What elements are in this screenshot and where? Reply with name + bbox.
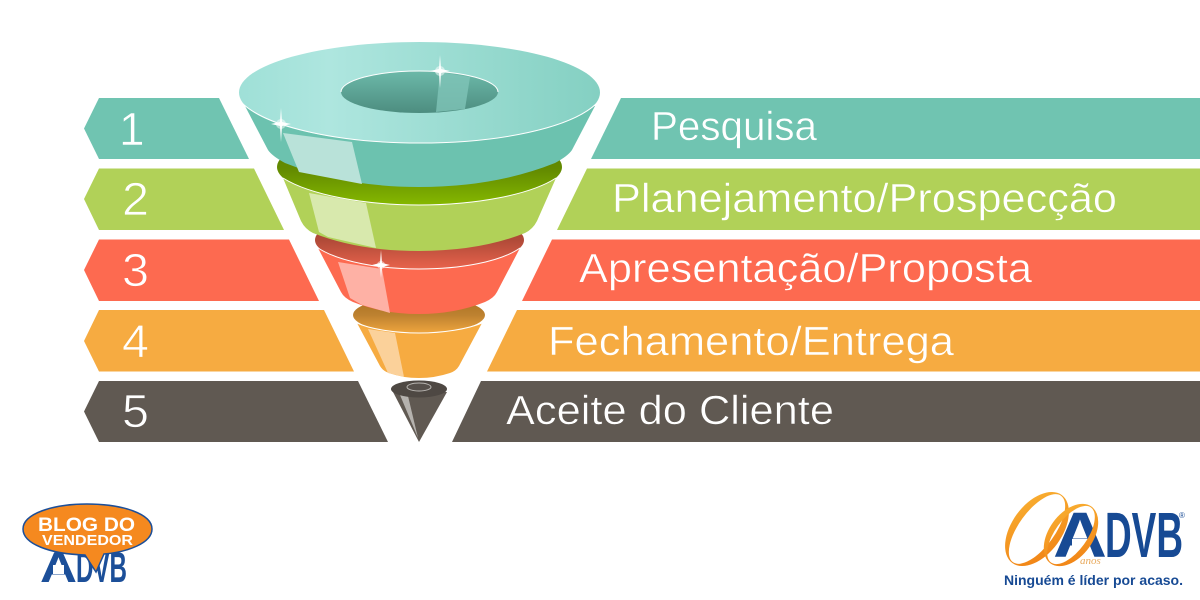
row 2 right bar: Planejamento/Prospecção: Planejamento/Prospecção [612, 175, 1117, 221]
row 4 right bar: Fechamento/Entrega [487, 310, 1200, 372]
logo: Blog do Vendedor: VENDEDOR [42, 532, 133, 549]
sparkle on top rim [430, 55, 450, 88]
funnel tier 5: dark cone [391, 380, 447, 442]
logo: Blog do Vendedor: BLOG DO [38, 515, 135, 536]
row 1 left tab [84, 98, 249, 159]
logo: ADVB 60 anos: anos [1080, 555, 1101, 567]
row 2 left tab [84, 168, 284, 230]
logo: ADVB 60 anos: Ninguém é líder por acaso. [1004, 572, 1183, 588]
logo: Blog do Vendedor: A [40, 544, 77, 592]
row 4 left tab [84, 310, 354, 372]
sparkle on left rim [271, 108, 291, 142]
funnel [239, 42, 600, 442]
logo: ADVB 60 anos [992, 480, 1185, 588]
row 5 right bar: Aceite do Cliente [452, 381, 1200, 442]
logo: ADVB 60 anos: A [1053, 499, 1107, 571]
funnel top ellipse with hole [239, 42, 600, 143]
sparkle on red tier [372, 250, 390, 278]
row 2 right bar: Planejamento/Prospecção [557, 168, 1200, 230]
row 5 right bar: Aceite do Cliente: Aceite do Cliente [506, 387, 834, 433]
funnel tier 2: green [277, 129, 562, 251]
logo: Blog do Vendedor [23, 504, 152, 592]
row 3 right bar: Apresentação/Proposta: Apresentação/Proposta [579, 245, 1032, 291]
funnel tier 4: orange [353, 296, 485, 378]
logo: Blog do Vendedor: DVB [76, 544, 127, 592]
logo: ADVB 60 anos: ® [1179, 511, 1185, 520]
row 2 left tab: 2 [122, 173, 149, 225]
row 1 left tab: 1 [119, 103, 145, 155]
row 3 left tab: 3 [122, 244, 149, 296]
funnel tier 3: red [315, 211, 524, 314]
row 4 left tab: 4 [122, 315, 149, 367]
row 3 left tab [84, 240, 319, 301]
row 5 left tab: 5 [122, 385, 149, 437]
funnel tier 1: teal body [245, 106, 595, 187]
row 4 right bar: Fechamento/Entrega: Fechamento/Entrega [548, 318, 954, 364]
row 3 right bar: Apresentação/Proposta [522, 240, 1200, 301]
row 1 right bar: Pesquisa [591, 98, 1200, 159]
row 1 right bar: Pesquisa: Pesquisa [651, 103, 817, 149]
row 5 left tab [84, 381, 388, 442]
